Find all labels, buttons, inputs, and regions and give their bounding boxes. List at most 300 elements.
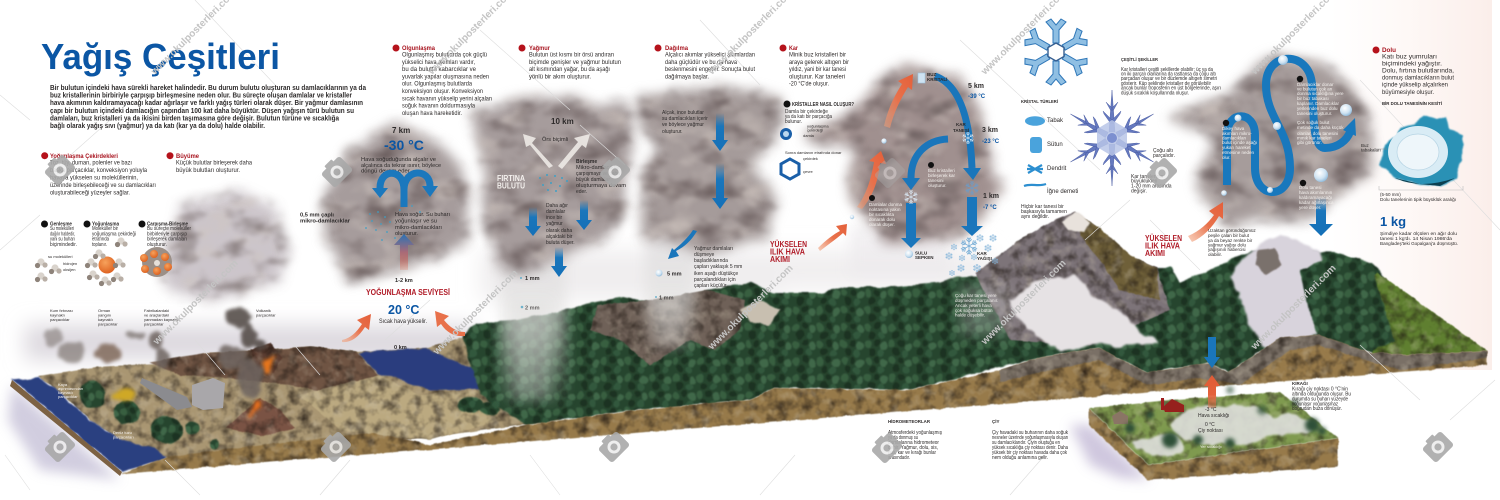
hail cloud callouts: Dolu tanesi (1299, 185, 1322, 190)
snow cloud callouts: oluşturur. (928, 183, 947, 188)
smoke columns (44, 307, 266, 398)
section 5: dissipation: beslenmesini engeller. Sonuçta bulut (665, 67, 755, 73)
section 6: snow: oluşturur. Kar taneleri (789, 74, 845, 80)
section 7: hail: Dolu (1382, 47, 1396, 54)
hailstones on path (1221, 55, 1352, 196)
aerosol source labels: ve araçlardaki (144, 312, 169, 318)
storm cloud labels: oluşturmaya devam (576, 183, 626, 189)
altitude and temperature labels: KAR (956, 122, 966, 127)
micro-droplet label (300, 212, 351, 224)
step B: condensation: Yoğunlaşma (92, 222, 119, 228)
cumulus cloud labels: 7 km (392, 126, 410, 135)
storm cloud labels: buluta düşer. (546, 240, 575, 246)
condensation level: 1-2 km (395, 278, 413, 284)
watermark text: www.okulposterleri.com (979, 258, 1069, 348)
crystal types: Tabak (1047, 118, 1064, 124)
section 4: rain: Yağmur (529, 45, 550, 52)
snowfall (945, 234, 998, 276)
storm cloud labels: alçaktaki bir (546, 234, 573, 240)
snow cloud callouts: noktasına yakın (869, 207, 901, 212)
section 1: condensation nuclei: üzerinde birleşebileceği ve su damlacıkları (50, 183, 156, 189)
various shapes text (1121, 56, 1221, 96)
drop sizes under storm cloud: 1 mm (525, 276, 540, 282)
left block edge (10, 380, 122, 476)
hail looping path (1227, 59, 1350, 192)
lake (357, 348, 519, 390)
hexagon icon (781, 159, 799, 179)
1 kg record: 1 kg (1380, 214, 1406, 229)
section 2: growth (166, 152, 253, 174)
warm updraft label right (1145, 234, 1182, 258)
hail layer label: tabakaları (1361, 148, 1381, 152)
condensation level: Sıcak hava yükselir. (379, 319, 427, 325)
hail cloud callouts (1222, 76, 1344, 210)
section 3: maturing: olur. Olgunlaşmış bulutlarda (402, 82, 473, 88)
section 7: hail (1372, 46, 1454, 106)
volcanic brown slopes (150, 347, 378, 395)
note on falling snow: halde düşebilir. (955, 312, 985, 318)
flake notes: değişir. (1131, 188, 1147, 194)
how crystals form: çekirdeği (807, 128, 823, 132)
crystal types: başkasıyla tamamen (1021, 209, 1067, 215)
ice crystal marker (918, 72, 947, 83)
hydrometeors text: damlalarına hidrometeor (888, 440, 939, 446)
various shapes text: ÇEŞİTLİ ŞEKİLLER (1121, 56, 1159, 62)
icon: column (1030, 137, 1042, 153)
section 7: hail: büyümesiyle oluşur. (1382, 90, 1434, 96)
how crystals form: Sonra damlanın etrafında donar (785, 150, 842, 155)
dissipating cloud labels: Alçak, ince bulutlar (662, 110, 704, 116)
curved rain arrow (668, 230, 697, 259)
storm cloud labels: Mikro-damlacıklar (576, 165, 620, 171)
shadow beneath the terrain block (8, 385, 120, 480)
cumulus cloud labels: -30 °C (384, 137, 424, 153)
intro paragraph (50, 85, 366, 130)
pale rocks (740, 300, 780, 325)
section 3: maturing (392, 44, 492, 117)
section 3: maturing: sıcak havanın yükselip yerini alçalan (402, 96, 492, 102)
condensation level: YOĞUNLAŞMA SEVİYESİ (366, 288, 450, 297)
step C: collision and coalescence: birbirleriyle çarpışıp (147, 231, 187, 237)
frost text: doğrudan buza dönüşür. (1292, 406, 1342, 412)
flake notes: 1-20 mm arasında (1131, 184, 1172, 190)
sea (12, 377, 167, 472)
heading 1: Yoğunlaşma Çekirdekleri (50, 153, 118, 160)
step C: collision and coalescence: oluşturur. (147, 242, 167, 248)
hail cloud callouts: etmesine neden (1222, 150, 1255, 155)
storm cloud labels: BULUTU (497, 182, 525, 190)
intro paragraph: damlaları, buz kristalleri ya da ikisini birden taşımasına göre değişir. Bulutun türüne ve sıcaklığa (50, 115, 339, 122)
section 4: rain (518, 44, 621, 80)
distant hail note: olabilir. (1208, 252, 1222, 257)
condensation level (366, 278, 450, 351)
1 kg record: tanesi 1 kg'dı. 14 Nisan 1986'da (1380, 236, 1453, 241)
snow flakes on path (904, 132, 979, 204)
snow path arrowheads (901, 168, 983, 248)
various shapes text: Kar kristalleri çeşitli şekillerde olabilir; üç ya da (1121, 67, 1213, 73)
pale growth cloud (165, 188, 290, 300)
frost text (1292, 379, 1351, 412)
strata grey upper layer (1000, 335, 1487, 385)
step A: expansion: Su molekülleri (50, 226, 74, 232)
sea labels: Kaya (58, 382, 68, 387)
section 3: maturing: Olgunlaşma (402, 45, 435, 52)
snow cloud callouts: tanesini (928, 178, 944, 183)
molecule diagram B (85, 237, 128, 286)
aerosol source labels: Fabrikalardaki (144, 308, 169, 313)
hail cloud callouts: olanlar, dolu tanesini (1297, 131, 1338, 136)
section 3: maturing: bu da bulutta kabarcıklar ve (402, 67, 477, 73)
hail cloud callouts: hava akımlarının (1299, 190, 1333, 195)
hail cloud callouts: kadar ağırlaşınca (1299, 200, 1334, 205)
dissipating cloud labels (662, 110, 742, 289)
frost text: durumda su buharı yüzeyde (1292, 396, 1348, 402)
mountain two rock (1255, 248, 1282, 275)
how crystals form: Damla bir çekirdeğe (785, 109, 828, 115)
storm cloud labels: ince bir (546, 215, 562, 221)
1 kg record (1380, 214, 1458, 246)
warm updraft label right: AKIMI (1145, 249, 1165, 258)
watermark text: www.okulposterleri.com (706, 263, 796, 353)
farm buildings (1112, 398, 1184, 424)
dew text: yüksek bir çiy noktası havada daha çok (992, 450, 1067, 456)
section 3: maturing: oluşan hava hareketidir. (402, 111, 462, 117)
note on falling snow: çok soğuksa bütün (955, 308, 993, 313)
frost text: Kırağı çiy noktası 0 °C'nin (1292, 386, 1348, 392)
dew text: nem olduğu anlamına gelir. (992, 455, 1048, 461)
dew block labels: -3 °C (1205, 407, 1217, 413)
volcano front (226, 398, 295, 436)
molecule diagram C (140, 247, 172, 277)
section 5: dissipation: dağılmaya başlar. (665, 74, 709, 80)
hail layer label: Buz (1361, 143, 1370, 148)
hail cloud callouts: metinde da daha küçük (1297, 125, 1344, 130)
altitude and temperature labels: 3 km (982, 127, 998, 134)
molecule diagram A: oksijen (63, 267, 75, 272)
cumulus cloud labels: Hava soğur. Su buharı (395, 212, 450, 218)
storm cloud labels: Daha ağır (546, 203, 568, 209)
section 6: snow: -20 °C'de oluşur. (789, 82, 829, 88)
step C: collision and coalescence: Bu süreçte moleküller (147, 226, 191, 232)
step A: expansion: dağılır haldedir, (50, 231, 75, 237)
storm cloud labels: yağmur (546, 221, 563, 227)
altitude and temperature labels: -7 °C (983, 205, 997, 211)
distant hail note: yağmur yağışı dolu (1208, 242, 1247, 248)
step A: expansion: biçimindedir. (50, 242, 77, 248)
section 7: hail: donmuş damlacıkların bulut (1382, 76, 1454, 82)
forest surface (462, 250, 1460, 425)
drop sizes under dissipating cloud: 5 mm (667, 272, 682, 278)
factory building (192, 378, 225, 410)
hail cloud callouts: bulut içinde aşağı (1222, 140, 1257, 145)
section 3: maturing: yükselici hava akımları vardır, (402, 60, 475, 66)
lava back (262, 355, 275, 372)
dissipating cloud labels: su damlacıkları içerir (662, 116, 708, 122)
section 1: condensation nuclei: Toz, tüy, duman, polenler ve bazı (50, 160, 132, 166)
drop sizes under storm cloud: 2 mm (525, 306, 540, 312)
hydrometeors text: Atmosferdeki yoğunlaşmış (888, 430, 942, 436)
snow cloud callouts: donarak dolu (869, 217, 896, 222)
distant hail note: Uzaktan göründüğümüz (1208, 228, 1257, 233)
misty patches (1135, 405, 1310, 455)
how crystals form: KRİSTALLER NASIL OLUŞUR? (792, 101, 854, 108)
sleet label (905, 250, 934, 260)
micro droplets (365, 205, 421, 241)
step B: condensation: toplanır. (92, 242, 107, 248)
drop sizes under dissipating cloud (655, 270, 682, 302)
storm cloud labels: eder. (576, 189, 587, 195)
crystal types: KRİSTAL TÜRLERİ (1021, 98, 1058, 104)
how crystals form (780, 100, 854, 179)
storm cloud labels: çarpışmaya ve daha (576, 171, 620, 177)
various shapes text: on iki parçalı olanlarına da rastlansa da çoğu altı (1121, 72, 1216, 78)
watermark text (149, 0, 1339, 358)
hydrometeors text: ya da donmuş su (888, 435, 918, 441)
aerosol source labels: kaynaklı (50, 312, 65, 318)
sea labels: parçacıklar (58, 394, 78, 399)
watermark text: www.okulposterleri.com (151, 258, 241, 348)
icon: star snowflake (1066, 90, 1158, 186)
snow cloud callouts: bir sıcaklıkta (869, 212, 895, 217)
section 7: hail: içinde yükselip alçalırken (1382, 82, 1448, 88)
note on falling snow: Çoğu kar tanesi yere (955, 293, 997, 298)
note on falling snow: Ancak yeterli hava (955, 303, 992, 308)
condensation level: 0 km (394, 345, 407, 351)
mountain one (975, 212, 1170, 345)
hydrometeors text: pus, kar ve kırağı bunlar (888, 450, 936, 456)
various shapes text: parçadan oluşur ve bir düzlemde altıgen simetri (1121, 76, 1217, 82)
hail cloud callouts: kaldıramayacağı (1299, 195, 1332, 200)
section 6: snow: Kar (789, 45, 798, 52)
hail cloud callouts: bir buz tabakası (1297, 96, 1329, 101)
volcano back (250, 343, 282, 378)
step C: collision and coalescence: birleşerek damlaları (147, 237, 187, 243)
crystal types: Sütun (1047, 142, 1063, 148)
section 5: dissipation: Alçalıcı akımlar yükselici akımlardan (665, 52, 755, 58)
dissipating cloud labels: parçalandıkları için (694, 277, 736, 283)
hail cloud callouts: donma sıcaklığına yere (1297, 91, 1344, 96)
warm updraft label left: ILIK HAVA (770, 248, 805, 256)
hail cloud callouts: kaplanır. Damlacıklar (1297, 101, 1340, 106)
hail cloud callouts: ve bulutun çok an (1297, 86, 1333, 92)
storm cloud (472, 96, 632, 268)
dissipating cloud labels: oluşturur. (662, 129, 683, 135)
step C: collision and coalescence: Çarpışma-Birleşme (147, 222, 188, 228)
aerosol source labels: Volkanik (256, 308, 271, 313)
various shapes text: düşük sıcaklık koşullarında oluşur. (1121, 90, 1189, 96)
dew text (992, 418, 1068, 461)
section 6: snow: yıldız, yani bir kar tanesi (789, 67, 846, 73)
section 1: condensation nuclei: başka parçacıklar, konveksiyon yoluyla (50, 168, 148, 174)
intro paragraph: çapı bir bulutun içindeki damlacığın çapından 100 kat daha büyüktür. Düşen yağışın türü bulutun su (50, 108, 354, 115)
warm updraft label right: YÜKSELEN (1145, 234, 1182, 243)
title: Yağış Çeşitleri (41, 36, 280, 77)
dew block labels: Yer sıcaklığı (1200, 444, 1222, 449)
distant hail note: peşile çalan bir bulut (1208, 233, 1250, 238)
section 4: rain: Bulutun üst kısmı bir örsü andıran (529, 52, 614, 58)
dew text: Çiy havadaki su buharının daha soğuk (992, 430, 1068, 436)
block shadow (1070, 425, 1150, 480)
section 4: rain: alt kısmından yağar, bu da aşağı (529, 67, 610, 73)
altitude and temperature labels: TANESİ (953, 127, 969, 133)
dew block labels: Çiy noktası (1198, 428, 1223, 434)
hydrometeors text (888, 418, 942, 461)
icon: needle bundle (1024, 184, 1046, 186)
dissipating cloud (636, 90, 778, 250)
dew text: su damlacıklarıdır. Çiyin oluştuğu en (992, 440, 1060, 446)
storm cloud labels: Örs biçimli (542, 136, 568, 143)
section 5: dissipation: daha güçlüdür ve bu da hava (665, 60, 738, 66)
horizon haze (25, 250, 990, 360)
warm updraft label right: ILIK HAVA (1145, 242, 1180, 250)
distant hail note (1208, 228, 1257, 257)
step A: expansion: Genleşme (50, 222, 72, 228)
watermark text: www.okulposterleri.com (1249, 263, 1339, 353)
size range: (5-50 mm) (1380, 192, 1401, 197)
storm cloud labels: Birleşme (576, 159, 597, 165)
crystal types: Dendrit (1047, 166, 1067, 172)
section 1: condensation nuclei (41, 152, 156, 196)
hail cloud callouts: gibi görünür. (1297, 140, 1322, 145)
warm updraft label left: YÜKSELEN (770, 240, 807, 249)
fog over forest under rain (512, 285, 1010, 400)
section 2: growth: Küçük bulutlar birleşerek daha (176, 160, 253, 166)
section 7: hail: BİR DOLU TANESİNİN KESİTİ (1382, 100, 1442, 106)
hail cloud (1172, 55, 1372, 228)
step B: condensation: yoğunlaşma çekirdeği (92, 231, 136, 237)
aerosol source labels: parçacıklar (98, 322, 118, 326)
sea labels: Deniz tuzu (113, 430, 132, 435)
aerosol source labels: Kum fırtınası (50, 308, 73, 313)
altitude and temperature labels (953, 83, 1000, 211)
step B: condensation: etrafında (92, 237, 109, 243)
dew text: yüksek sıcaklığa çiy noktası denir. Daha (992, 445, 1068, 451)
hail cloud callouts: Damlacıklar donar (1297, 82, 1334, 87)
dew block labels (1198, 407, 1229, 449)
dissipating cloud labels: başladıklarında (694, 258, 728, 264)
dissipating rain arrows (712, 113, 728, 209)
storm cloud labels: büyük damlalar (576, 177, 610, 183)
aerosol source labels (50, 308, 276, 326)
icon: plate (1025, 116, 1045, 126)
various shapes text: gösterir. Küp şeklinde kristaller de görülebilir (1121, 81, 1211, 87)
icon: large blue snowflake crystal (1022, 19, 1090, 85)
storm droplets (539, 174, 568, 192)
hydrometeors text: HİDROMETEORLAR (888, 418, 931, 424)
section 6: snow: Minik buz kristalleri bir (789, 52, 846, 58)
1 kg record: Şimdiye kadar ölçülen en ağır dolu (1380, 231, 1458, 236)
cumulus cloud labels: mikro-damlacıkları (395, 225, 442, 231)
icon: dendrite (1027, 165, 1043, 173)
main terrain block (10, 212, 1487, 476)
snow cloud (808, 64, 1002, 238)
section 7: hail: Dolu, fırtına bulutlarında, (1382, 68, 1454, 74)
snow cloud callouts: Damlalar donma (869, 202, 903, 207)
dissipating cloud labels: ve böylece yağmur (662, 122, 704, 128)
hail cloud callouts: tanesini oluşturur. (1297, 111, 1332, 116)
condensation level: 20 °C (388, 303, 419, 317)
hydrometeors text: denir. Yağmur, dolu, sis, (888, 445, 938, 451)
watermark camera icons (42, 152, 1454, 464)
section 5: dissipation: Dağılma (665, 45, 688, 52)
snow cloud rising air arrows (818, 74, 913, 251)
intro paragraph: buz kristallerinin birbiriyle çarpışıp birleşmesine neden olur. Bu süreçte oluşan damlalar ve kristaller (50, 93, 352, 100)
molecule diagram A: hidrojen (63, 261, 77, 266)
how crystals form: çekirdek (803, 156, 818, 161)
cumulus cloud labels: yoğunlaşır ve su (395, 218, 437, 224)
sea labels: aşınmasından (58, 386, 83, 391)
aerosol source labels: parçacıklar (50, 317, 70, 322)
aerosol source labels: parçacıklar (256, 312, 276, 318)
storm cloud labels: FIRTINA (497, 174, 525, 183)
drop sizes under dissipating cloud: 1 mm (659, 296, 674, 302)
flake notes: Kar tanelerinin (1131, 174, 1163, 180)
snow cloud callouts: olarak düşer. (869, 222, 895, 227)
forest fire (113, 389, 137, 401)
distant hail note: yağışının habercisi (1208, 247, 1246, 252)
storm cloud labels (497, 117, 626, 246)
number badge 2 (166, 152, 174, 159)
altitude and temperature labels: -39 °C (968, 94, 986, 100)
cumulus cloud labels (361, 126, 450, 237)
dissipating cloud labels: iken aşağı düştükçe (694, 271, 738, 277)
crystal types: Hiçbir kar tanesi bir (1021, 204, 1064, 210)
size range (1379, 186, 1463, 202)
section 3: maturing: soğuk havanın doldurmasıyla (402, 104, 476, 110)
rising air arrow (394, 234, 414, 270)
ice crystal marker: BUZ (927, 72, 936, 77)
storm rain arrows (525, 200, 592, 277)
intro paragraph: bağlı olarak yağış sıvı (yağmur) ya da katı (kar ya da dolu) halde olabilir. (50, 123, 265, 130)
altitude and temperature labels: 1 km (983, 193, 999, 200)
snow cloud callouts: Buz kristalleri (928, 168, 955, 173)
micro-droplet label: 0,5 mm çaplı (300, 212, 334, 218)
dissipating cloud labels: çapları küçülür. (694, 283, 728, 289)
aerosol source labels: Orman (98, 308, 110, 313)
how crystals form: bulunur. (785, 119, 802, 125)
step B: condensation: Moleküller bir (92, 226, 118, 232)
sleet label: SEPKEN (915, 255, 934, 260)
hail layer label (1361, 143, 1387, 152)
altitude and temperature labels: -23 °C (982, 139, 1000, 145)
section 6: snow: araya gelerek altıgen bir (789, 60, 849, 66)
watermark text: www.okulposterleri.com (431, 268, 521, 358)
warm updraft label left (770, 240, 807, 264)
strata front edge (120, 335, 1487, 474)
micro-droplet label: mikro-damlacıklar (300, 218, 351, 224)
step A: expansion: yani su buharı (50, 237, 75, 243)
flake notes: büyüklükleri (1131, 178, 1157, 184)
mountain one peak snow (1062, 212, 1090, 232)
block trees (1125, 386, 1326, 448)
aerosol source labels: kaynaklı (98, 317, 113, 322)
rain shafts (500, 225, 950, 408)
note on falling snow (955, 293, 998, 318)
1 kg record: Bangladeş'teki Gopalganj'a düşmüştü. (1380, 241, 1458, 246)
distant hail note: ya da beyaz renkte bir (1208, 238, 1253, 243)
intro paragraph: hava akımının kaldıramayacağı kadar ağırlaşır ve farklı yağış türleri olarak düşer. Bir yağmur damlasının (50, 100, 363, 107)
how crystals form: ya da katı bir parçacığa (785, 114, 832, 120)
molecule diagram A: su molekülleri (48, 254, 73, 259)
background tint (1330, 0, 1492, 370)
aerosol source labels: yangını (98, 312, 111, 318)
hail updraft arrow (1188, 202, 1223, 242)
crystal types: aynı değildir. (1021, 214, 1049, 220)
hail cloud callouts: yerlerinden buz dolu (1297, 106, 1338, 111)
small dew block (1070, 375, 1338, 480)
block grass (1089, 392, 1338, 465)
hail cloud callouts: mınık kar taneleri (1297, 136, 1332, 140)
